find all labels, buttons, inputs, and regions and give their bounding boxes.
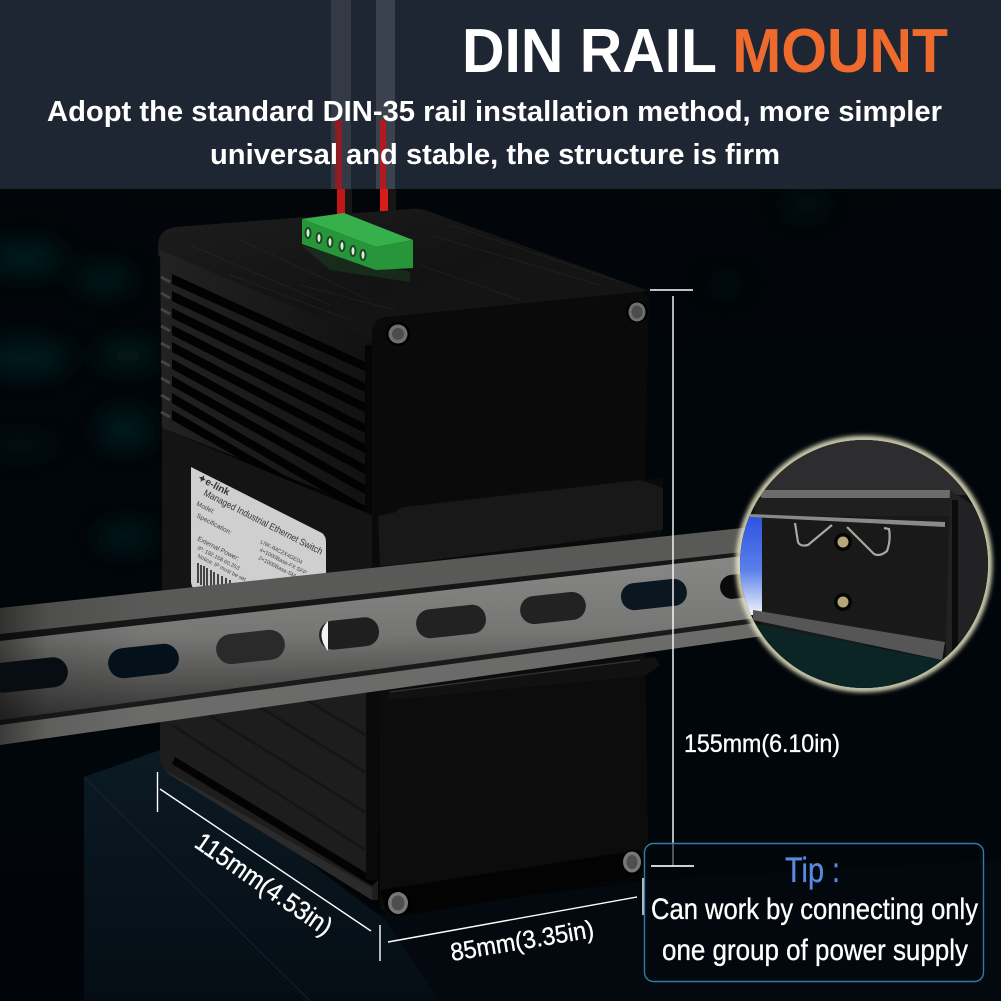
cooling fins bbox=[161, 274, 377, 530]
clip dark bar bbox=[378, 480, 663, 566]
corner screw bottom-left bbox=[386, 890, 410, 916]
tip box bbox=[644, 844, 984, 982]
spec label bbox=[191, 467, 326, 590]
rail left-end shading bbox=[0, 590, 160, 745]
redrawn height tick over box bbox=[651, 865, 694, 867]
green terminal block bbox=[302, 213, 413, 282]
rail top highlight bbox=[760, 490, 952, 498]
upper screw bbox=[834, 533, 852, 551]
background above rail bbox=[761, 440, 967, 495]
lens glow ring bbox=[739, 439, 989, 689]
spec label: Managed Industrial Ethernet Switch bbox=[202, 488, 324, 558]
height dimension line bbox=[650, 290, 694, 866]
lower screw bbox=[834, 593, 852, 611]
tip heading: Tip : bbox=[785, 851, 840, 890]
corner screw top-left bbox=[386, 322, 410, 346]
barcode bbox=[198, 563, 230, 586]
front face lower bbox=[378, 640, 648, 915]
teal base bbox=[756, 624, 942, 688]
spec label: LNK-IMC2X4GE04 bbox=[259, 539, 303, 566]
right pillar bbox=[946, 490, 988, 658]
power wires bbox=[337, 189, 396, 230]
ethernet switch body bbox=[158, 208, 662, 590]
height label: 155mm(6.10in) bbox=[684, 730, 840, 758]
length dimension lines bbox=[158, 772, 380, 961]
spec label: Notice: IP must be set bbox=[196, 553, 247, 583]
lens contents bbox=[740, 440, 988, 688]
rail lower edge bbox=[750, 514, 945, 527]
pedestal left face bbox=[84, 750, 440, 1001]
side notch column bbox=[366, 640, 378, 880]
subtitle: universal and stable, the structure is firm bbox=[210, 139, 780, 171]
detail lens: rear clip photo bbox=[735, 435, 995, 700]
blurred data-centre lights bbox=[0, 193, 830, 547]
front face upper bbox=[372, 292, 663, 590]
block reflection bbox=[302, 246, 410, 282]
lower side face bbox=[160, 640, 378, 900]
upper rail clip bbox=[378, 480, 663, 566]
subtitle bbox=[47, 96, 942, 171]
corner screw top-right bbox=[626, 301, 648, 323]
lower slot bbox=[172, 757, 378, 886]
subtitle: Adopt the standard DIN-35 rail installation method, more simpler bbox=[47, 96, 942, 128]
lower groove bbox=[0, 616, 770, 725]
width dimension lines bbox=[388, 878, 643, 942]
upper flange bbox=[0, 525, 770, 636]
lower switch body bbox=[160, 640, 660, 916]
blue backdrop bbox=[740, 516, 762, 615]
spring clip right bbox=[847, 527, 890, 555]
spec label: 2×1000Base-SM bbox=[257, 555, 297, 580]
top banner bbox=[0, 0, 1001, 189]
terminal holes bbox=[306, 228, 366, 260]
pedestal face bbox=[84, 750, 1001, 1001]
mount plate bbox=[762, 518, 770, 645]
lower mounting bracket bbox=[388, 657, 660, 700]
width label: 85mm(3.35in) bbox=[448, 915, 596, 967]
pedestal under the switch bbox=[84, 750, 1001, 1001]
centre web bbox=[0, 553, 770, 722]
top face brushed highlights bbox=[190, 225, 620, 320]
fin notches bbox=[161, 277, 170, 417]
spec label: Model: bbox=[195, 501, 216, 516]
spec label: 4×1000Base-FX SFP bbox=[258, 547, 308, 577]
base chamfer bbox=[165, 770, 372, 900]
spec label: External Power: bbox=[196, 536, 240, 563]
lower flange bbox=[0, 621, 770, 745]
spec label: Specification: bbox=[195, 513, 233, 536]
title: DIN RAIL MOUNT bbox=[462, 17, 948, 86]
upper groove bbox=[0, 549, 770, 641]
upper side face with fins bbox=[160, 250, 372, 510]
clip spring behind rail bbox=[482, 551, 564, 566]
spec label: ✦e-link bbox=[196, 473, 232, 499]
spec label: IP: 192.168.60.253 bbox=[196, 545, 240, 572]
lower side plate bbox=[162, 428, 372, 640]
block front bbox=[302, 219, 413, 270]
block top bbox=[302, 213, 413, 247]
pedestal edge bbox=[84, 777, 310, 1001]
wires seen through banner bbox=[331, 0, 395, 189]
bottom lip of the front face bbox=[380, 850, 646, 916]
spring clip left bbox=[795, 523, 832, 546]
corner screw bottom-right bbox=[621, 850, 643, 874]
length label: 115mm(4.53in) bbox=[190, 826, 338, 942]
tip callout bbox=[644, 844, 984, 982]
rail dark band bbox=[755, 498, 950, 516]
rail slots bbox=[0, 572, 761, 694]
lower bracket bbox=[753, 610, 945, 660]
DIN rail bbox=[0, 525, 770, 745]
notch shadow column bbox=[365, 345, 377, 515]
lower side stripes bbox=[172, 690, 365, 850]
top face bbox=[158, 209, 649, 345]
